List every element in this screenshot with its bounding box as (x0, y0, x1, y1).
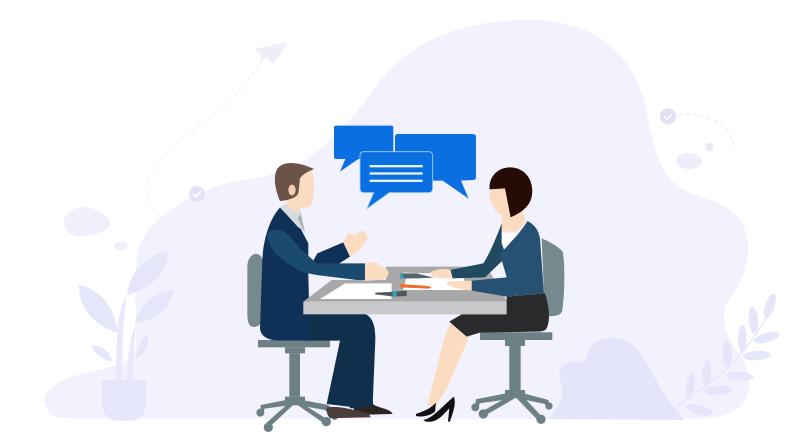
man's shirt and tie (280, 203, 305, 233)
man's head (275, 163, 314, 213)
pens on table (375, 273, 434, 297)
woman's neck and shirt (500, 207, 526, 254)
woman's shoes (416, 397, 455, 422)
man's chair (247, 254, 338, 432)
dashed path: left loop with check badge (147, 60, 262, 262)
hill (548, 338, 684, 420)
branch with leaves (677, 292, 781, 418)
woman's far sleeve (450, 223, 507, 278)
speech bubble 3 with lines (360, 152, 433, 209)
cloud right (676, 153, 702, 169)
icon: paper plane (254, 42, 288, 64)
speech bubble 1 (334, 126, 393, 172)
man's hand on table (365, 262, 389, 281)
man's sleeve (267, 230, 365, 281)
man's near hand raised (343, 231, 368, 257)
man's torso (260, 208, 310, 341)
cloud left (64, 207, 110, 237)
meeting figures, drawn in a 3x coordinate space (247, 126, 564, 432)
icon: check badge left (189, 186, 205, 202)
small dot right (706, 143, 714, 151)
table (303, 267, 507, 314)
woman's hands (430, 269, 472, 291)
man's legs (303, 314, 375, 408)
woman's skirt (449, 293, 549, 337)
small dot left (114, 242, 128, 250)
icon: check badge right (660, 108, 676, 124)
woman's chair (471, 238, 564, 424)
woman's head (489, 167, 532, 217)
woman's leg (427, 318, 469, 407)
man's far arm (310, 242, 350, 267)
woman's torso and near sleeve (472, 221, 544, 297)
man's shoes (326, 404, 393, 418)
speech bubble 2 (395, 134, 476, 199)
plant in pot (79, 251, 174, 421)
dashed loops right with check badge (617, 114, 734, 258)
